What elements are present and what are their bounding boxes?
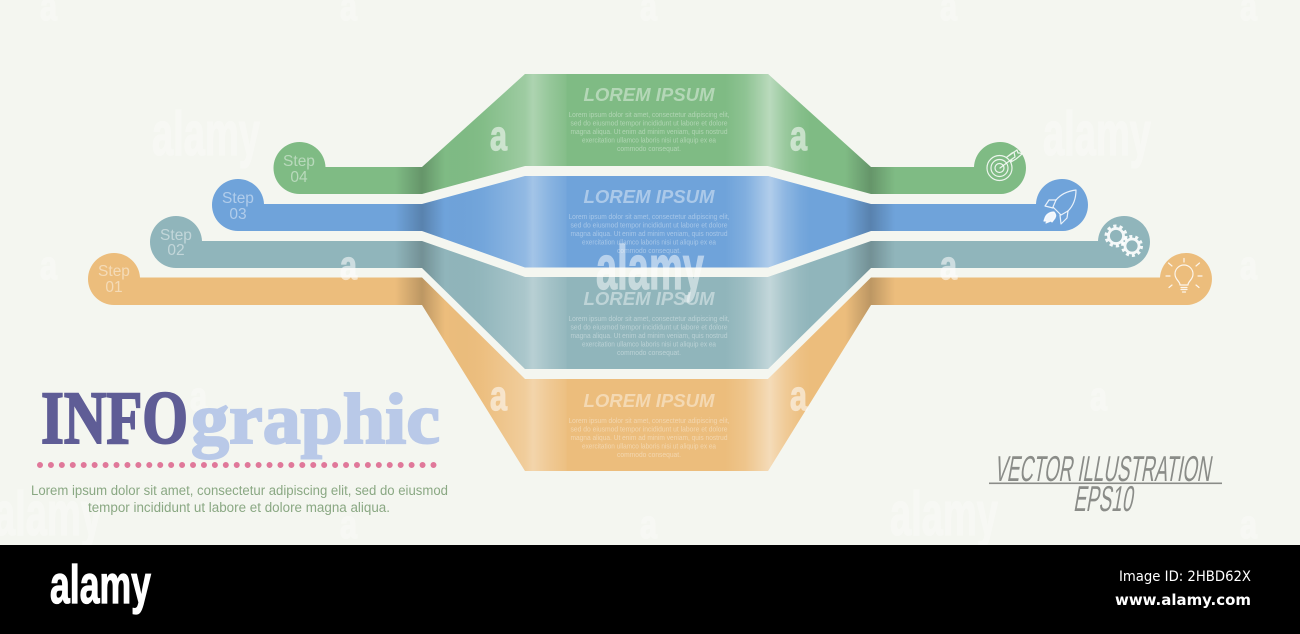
panel text: step 04: exercitation ullamco laboris nisi ut aliquip ex ea — [582, 138, 716, 144]
small panel watermarks: a — [790, 372, 807, 419]
step 03 label — [222, 190, 254, 223]
panel text: step 01 — [568, 418, 730, 459]
footer logo: alamy — [50, 555, 151, 615]
small panel watermarks — [340, 112, 958, 419]
faint background watermarks: a — [190, 375, 208, 419]
small panel watermarks: a — [490, 112, 507, 159]
faint background watermarks: alamy — [890, 480, 998, 549]
step 03 label: Step — [222, 190, 254, 207]
step 02 label: 02 — [167, 242, 185, 259]
icon: target with arrow — [987, 150, 1022, 180]
panel title: step 04: LOREM IPSUM — [584, 84, 715, 105]
panel text: step 03: magna aliqua. Ut enim ad minim veniam, quis nostrud — [570, 231, 728, 238]
step 01 label: Step — [98, 263, 130, 280]
band: step 03 blue — [212, 176, 1088, 268]
panel text: step 04: magna aliqua. Ut enim ad minim veniam, quis nostrud — [570, 129, 728, 136]
small panel watermarks: a — [790, 112, 807, 159]
panel title: step 02: LOREM IPSUM — [584, 288, 715, 309]
faint background watermarks: a — [640, 503, 658, 547]
vector illustration caption — [989, 448, 1222, 519]
step 04 label — [283, 153, 315, 186]
step 02 label — [160, 227, 192, 259]
step 03 label: 03 — [229, 206, 247, 223]
heading: INFOgraphic — [41, 377, 440, 460]
faint background watermarks: a — [1090, 375, 1108, 419]
panel text: step 03: commodo consequat. — [617, 248, 681, 255]
panel text: step 02 — [568, 316, 730, 357]
faint background watermarks: a — [340, 503, 358, 547]
heading: INFOgraphic: INFO — [41, 377, 188, 460]
icon: gears — [1106, 226, 1142, 256]
panel text: step 01: sed do eiusmod tempor incididunt ut labore et dolore — [570, 426, 728, 434]
panel text: step 04: sed do eiusmod tempor incididunt ut labore et dolore — [570, 120, 728, 128]
faint background watermarks: a — [1240, 503, 1258, 547]
faint background watermarks: alamy — [152, 100, 260, 169]
panel text: step 01: Lorem ipsum dolor sit amet, consectetur adipiscing elit, — [568, 418, 730, 425]
panel text: step 03: sed do eiusmod tempor incididunt ut labore et dolore — [570, 222, 728, 230]
step 04 label: Step — [283, 153, 315, 170]
icon: light bulb — [1166, 258, 1202, 292]
step 01 label — [98, 263, 130, 296]
panel text: step 02: commodo consequat. — [617, 350, 681, 357]
heading: INFOgraphic: graphic — [191, 379, 440, 459]
small panel watermarks: a — [340, 244, 358, 288]
panel text: step 01: magna aliqua. Ut enim ad minim veniam, quis nostrud — [570, 435, 728, 442]
website: www.alamy.com — [1115, 591, 1251, 609]
faint background watermarks: alamy — [1043, 100, 1151, 169]
central watermark: alamy — [596, 234, 704, 303]
step 01 label: 01 — [105, 279, 123, 296]
band: step 01 orange — [88, 253, 1212, 471]
step 02 label: Step — [160, 227, 192, 244]
panel text: step 02: Lorem ipsum dolor sit amet, consectetur adipiscing elit, — [568, 316, 730, 323]
panel text: step 04 — [568, 112, 730, 153]
panel text: step 03: exercitation ullamco laboris nisi ut aliquip ex ea — [582, 240, 716, 246]
panel text: step 02: exercitation ullamco laboris nisi ut aliquip ex ea — [582, 342, 716, 348]
panel text: step 03 — [568, 214, 730, 255]
panel text: step 04: commodo consequat. — [617, 146, 681, 153]
panel text: step 02: sed do eiusmod tempor incididunt ut labore et dolore — [570, 324, 728, 332]
panel text: step 04: Lorem ipsum dolor sit amet, consectetur adipiscing elit, — [568, 112, 730, 119]
band: step 02 teal — [150, 216, 1150, 369]
small panel watermarks: a — [490, 372, 507, 419]
step 04 label: 04 — [290, 169, 308, 186]
panel title: step 01: LOREM IPSUM — [584, 390, 715, 411]
panel text: step 01: commodo consequat. — [617, 452, 681, 459]
panel text: step 01: exercitation ullamco laboris nisi ut aliquip ex ea — [582, 444, 716, 450]
panel text: step 03: Lorem ipsum dolor sit amet, consectetur adipiscing elit, — [568, 214, 730, 221]
faint background watermarks: a — [40, 244, 58, 288]
small panel watermarks: a — [940, 244, 958, 288]
band: step 04 green — [274, 74, 1026, 194]
image id: Image ID: 2HBD62X — [1119, 569, 1251, 585]
footer bar — [0, 545, 1300, 634]
icon: rocket — [1044, 190, 1076, 224]
panel title: step 03: LOREM IPSUM — [584, 186, 715, 207]
intro paragraph: tempor incididunt ut labore et dolore magna aliqua. — [88, 500, 390, 515]
vector illustration caption: EPS10 — [1072, 478, 1138, 519]
panel text: step 02: magna aliqua. Ut enim ad minim veniam, quis nostrud — [570, 333, 728, 340]
intro paragraph — [31, 483, 448, 515]
intro paragraph: Lorem ipsum dolor sit amet, consectetur adipiscing elit, sed do eiusmod — [31, 483, 448, 498]
dotted divider — [40, 462, 434, 468]
faint background watermarks: a — [1240, 244, 1258, 288]
